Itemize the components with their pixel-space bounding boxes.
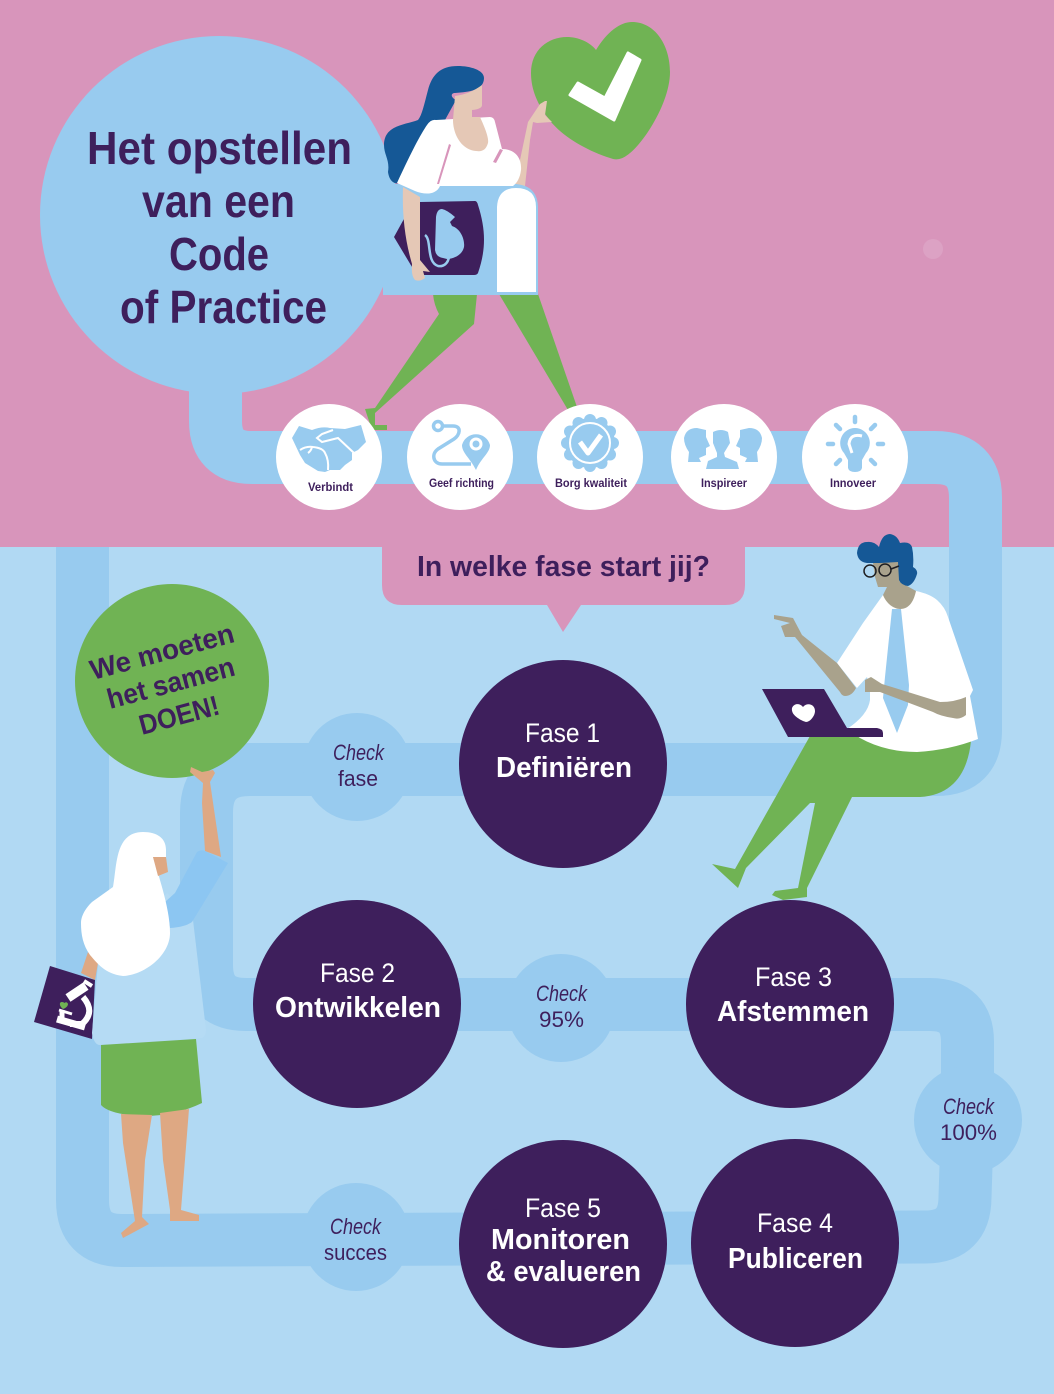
icon: quality badge xyxy=(537,404,643,510)
icon: light bulb xyxy=(802,404,908,510)
man with laptop xyxy=(712,534,978,900)
raised arm xyxy=(190,767,221,857)
icon: route xyxy=(407,404,513,510)
hair xyxy=(81,832,170,976)
book with mouse xyxy=(394,201,484,275)
green circle slogan: het samen xyxy=(104,651,238,715)
neck xyxy=(883,582,916,609)
green circle slogan: DOEN! xyxy=(136,690,223,741)
speech bubble xyxy=(382,547,745,632)
legs xyxy=(121,1114,152,1238)
check 100% xyxy=(914,1066,1022,1174)
face xyxy=(153,857,168,876)
fase 2: Fase 2 xyxy=(320,958,395,988)
book xyxy=(34,966,95,1039)
title: van een xyxy=(142,175,295,227)
speech bubble: In welke fase start jij? xyxy=(417,551,710,583)
check 95%: Check xyxy=(536,981,588,1006)
arm to book xyxy=(81,952,98,980)
woman with microscope book xyxy=(34,767,228,1238)
hair xyxy=(384,66,484,184)
green circle slogan xyxy=(75,584,269,778)
arm and hand xyxy=(515,101,552,186)
fase 3: Fase 3 xyxy=(755,962,832,992)
title bubble xyxy=(40,36,398,394)
back arm xyxy=(774,615,856,696)
title: Code xyxy=(169,228,269,280)
check fase: fase xyxy=(338,766,378,791)
fase 3 xyxy=(686,900,894,1108)
icon circles row xyxy=(276,404,908,510)
icon: handshake xyxy=(276,404,382,510)
legs xyxy=(365,294,477,430)
title: Het opstellen xyxy=(87,122,352,174)
green circle slogan: We moeten xyxy=(87,618,238,686)
head xyxy=(873,561,900,590)
fase 1 xyxy=(459,660,667,868)
fase 2 xyxy=(253,900,461,1108)
fase 5: Monitoren xyxy=(491,1224,630,1256)
fase 5: Fase 5 xyxy=(525,1193,601,1223)
front arm xyxy=(865,677,966,719)
check 100%: Check xyxy=(943,1094,995,1119)
check succes xyxy=(302,1183,410,1291)
check 95% xyxy=(507,954,615,1062)
fase 1: Fase 1 xyxy=(525,718,600,748)
glasses xyxy=(864,564,899,577)
laptop heart xyxy=(792,704,815,722)
woman with heart xyxy=(365,22,670,430)
fase 2: Ontwikkelen xyxy=(275,992,441,1024)
winding path xyxy=(82,380,976,1240)
check succes: Check xyxy=(330,1214,382,1239)
heart xyxy=(531,22,670,159)
label: Verbindt xyxy=(308,482,353,494)
fase 5 xyxy=(459,1140,667,1348)
blouse xyxy=(92,893,206,1045)
microscope xyxy=(57,981,92,1027)
hair xyxy=(857,534,917,586)
legs xyxy=(712,736,971,900)
fase 5: & evalueren xyxy=(486,1256,641,1288)
fase 1: Definiëren xyxy=(496,752,632,784)
phase circles xyxy=(253,660,899,1348)
lower arm xyxy=(403,187,430,281)
sleeve xyxy=(165,850,228,928)
check 95%: 95% xyxy=(539,1007,584,1032)
check 100%: 100% xyxy=(940,1120,997,1145)
face and neck xyxy=(453,85,488,151)
label: Inspireer xyxy=(701,478,747,490)
label: Geef richting xyxy=(429,478,494,490)
skirt xyxy=(101,1039,202,1116)
fase 3: Afstemmen xyxy=(717,996,869,1028)
check fase xyxy=(303,713,411,821)
icon: heads xyxy=(671,404,777,510)
fase 4: Fase 4 xyxy=(757,1208,833,1238)
check mark xyxy=(570,53,640,120)
title xyxy=(87,122,352,333)
label: Innoveer xyxy=(830,478,876,490)
shirt xyxy=(837,591,978,752)
check succes: succes xyxy=(324,1240,387,1265)
fase 4: Publiceren xyxy=(728,1243,863,1275)
label: Borg kwaliteit xyxy=(555,478,627,490)
title: of Practice xyxy=(120,281,327,333)
shirt xyxy=(397,117,521,194)
apron xyxy=(383,184,538,295)
check fase: Check xyxy=(333,740,385,765)
fase 4 xyxy=(691,1139,899,1347)
laptop xyxy=(762,689,883,737)
check circles xyxy=(302,713,1022,1291)
tie xyxy=(883,609,909,733)
